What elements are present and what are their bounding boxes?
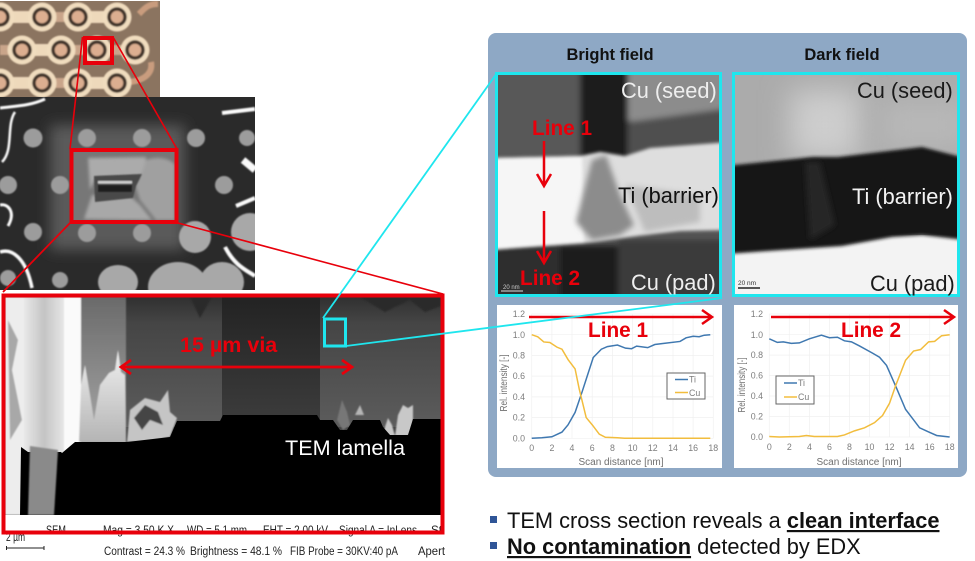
chart: Line 1 intensity profile: Rel. intensity [-] [499, 354, 510, 412]
SEM info bar text: SEM [46, 525, 66, 537]
label: Line 1 with arrow [532, 117, 592, 186]
photo: optical view of via chains [0, 1, 160, 98]
SEM info bar text [6, 525, 446, 558]
chart: Line 1 intensity profile: 0.6 [513, 371, 525, 381]
bullet list: key findings [490, 508, 939, 559]
chart: Line 1 intensity profile: 4 [570, 443, 575, 453]
chart: Line 1 intensity profile: 0.2 [513, 412, 525, 422]
chart: Line 1 intensity profile: 0.4 [513, 392, 525, 402]
bright field border [496, 74, 720, 296]
SEM info bar text: St [431, 525, 443, 537]
measurement: 15 µm via: 15 µm via [180, 333, 278, 357]
SEM info bar text: FIB Probe = 30KV:40 pA [290, 546, 398, 558]
chart: Line 1 intensity profile: Scan distance [nm] [578, 457, 664, 468]
legend [667, 373, 705, 399]
label: Line 1 with arrow: Line 1 [532, 117, 592, 140]
chart: Line 2 intensity profile: 10 [865, 442, 874, 452]
image: dark field TEM [725, 74, 970, 305]
legend [776, 376, 814, 404]
chart: Line 2 intensity profile: 8 [847, 442, 852, 452]
chart: Line 2 intensity profile: Scan distance [nm] [816, 457, 902, 468]
chart: Line 1 intensity profile: 10 [628, 443, 638, 453]
arrow and title: Line 2 [771, 310, 954, 342]
legend: Cu [798, 392, 809, 402]
chart: Line 1 intensity profile: 1.2 [513, 309, 525, 319]
chart: Line 2 intensity profile: 1.0 [751, 330, 763, 340]
image: bright field TEM [490, 66, 730, 302]
dark field border [734, 74, 958, 296]
image: dark field TEM: 20 nm [738, 280, 756, 287]
image: SEM top view of via with FIB cut [0, 97, 255, 290]
arrow and title: Line 2: Line 2 [841, 319, 901, 342]
SEM info bar text: EHT = 2.00 kV [263, 525, 328, 537]
chart: Line 1 intensity profile: 6 [590, 443, 595, 453]
chart: Line 1 intensity profile: 0.0 [513, 434, 525, 444]
chart: Line 2 intensity profile: 0.6 [751, 370, 763, 380]
heading: Dark field: Dark field [804, 46, 880, 64]
legend: Ti [689, 374, 696, 384]
measurement: 15 µm via [121, 333, 352, 374]
cyan selection box and zoom lines [323, 73, 722, 346]
red zoom lines from photo to SEM box [3, 37, 443, 294]
chart: Line 2 intensity profile: 0.4 [751, 391, 763, 401]
SEM info bar text: Contrast = 24.3 % [104, 546, 185, 558]
chart: Line 1 intensity profile: 14 [668, 443, 678, 453]
chart: Line 2 intensity profile: 6 [827, 442, 832, 452]
image: SEM cross section of via [4, 296, 446, 558]
label: Ti (barrier): Ti (barrier) [852, 184, 953, 209]
chart: Line 2 intensity profile: 0.0 [751, 432, 763, 442]
chart: Line 2 intensity profile: 4 [807, 442, 812, 452]
chart: Line 2 intensity profile: 18 [945, 442, 955, 452]
chart: Line 1 intensity profile: 0 [529, 443, 534, 453]
arrow and title: Line 1 [529, 310, 712, 342]
label: Line 2 with arrow [520, 211, 580, 290]
label: Ti (barrier): Ti (barrier) [618, 183, 719, 208]
SEM info bar text: Mag = 3.50 K X [103, 525, 174, 537]
SEM info bar text: 2 µm [6, 532, 25, 544]
chart: Line 1 intensity profile: 18 [708, 443, 718, 453]
chart: Line 1 intensity profile: 12 [648, 443, 658, 453]
chart: Line 1 intensity profile: 2 [549, 443, 554, 453]
chart: Line 2 intensity profile [734, 305, 958, 468]
chart: Line 1 intensity profile [497, 305, 722, 468]
label: Cu (pad): Cu (pad) [870, 271, 955, 296]
label: Cu (seed): Cu (seed) [857, 78, 953, 103]
arrow and title: Line 1: Line 1 [588, 319, 648, 342]
legend: Ti [798, 378, 805, 388]
chart: Line 2 intensity profile: 2 [787, 442, 792, 452]
label: Line 2 with arrow: Line 2 [520, 267, 580, 290]
chart: Line 1 intensity profile: 1.0 [513, 330, 525, 340]
chart: Line 2 intensity profile: 16 [925, 442, 935, 452]
chart: Line 2 intensity profile: 14 [905, 442, 915, 452]
chart: Line 1 intensity profile: 0.8 [513, 350, 525, 360]
label: TEM lamella: TEM lamella [285, 435, 406, 460]
SEM info bar text: Signal A = InLens [339, 525, 417, 537]
chart: Line 1 intensity profile: 8 [610, 443, 615, 453]
chart: Line 2 intensity profile: Rel. intensity [-] [737, 357, 748, 412]
SEM info bar text: Brightness = 48.1 % [190, 546, 282, 558]
chart: Line 2 intensity profile: 0 [767, 442, 772, 452]
chart: Line 2 intensity profile: 1.2 [751, 309, 763, 319]
panel: TEM results [488, 33, 970, 477]
SEM info bar text: Apert [418, 546, 446, 558]
legend: Cu [689, 388, 700, 398]
label: Cu (seed): Cu (seed) [621, 78, 717, 103]
SEM info bar text: WD = 5.1 mm [187, 525, 247, 537]
chart: Line 2 intensity profile: 0.8 [751, 350, 763, 360]
bullet 1: TEM cross section reveals a clean interface [507, 508, 939, 533]
heading: Bright field: Bright field [566, 46, 654, 64]
chart: Line 1 intensity profile: 16 [688, 443, 698, 453]
bullet 2: No contamination detected by EDX [507, 534, 861, 559]
label: Cu (pad): Cu (pad) [631, 270, 716, 295]
image: bright field TEM: 20 nm [503, 285, 520, 291]
chart: Line 2 intensity profile: 0.2 [751, 412, 763, 422]
chart: Line 2 intensity profile: 12 [885, 442, 895, 452]
